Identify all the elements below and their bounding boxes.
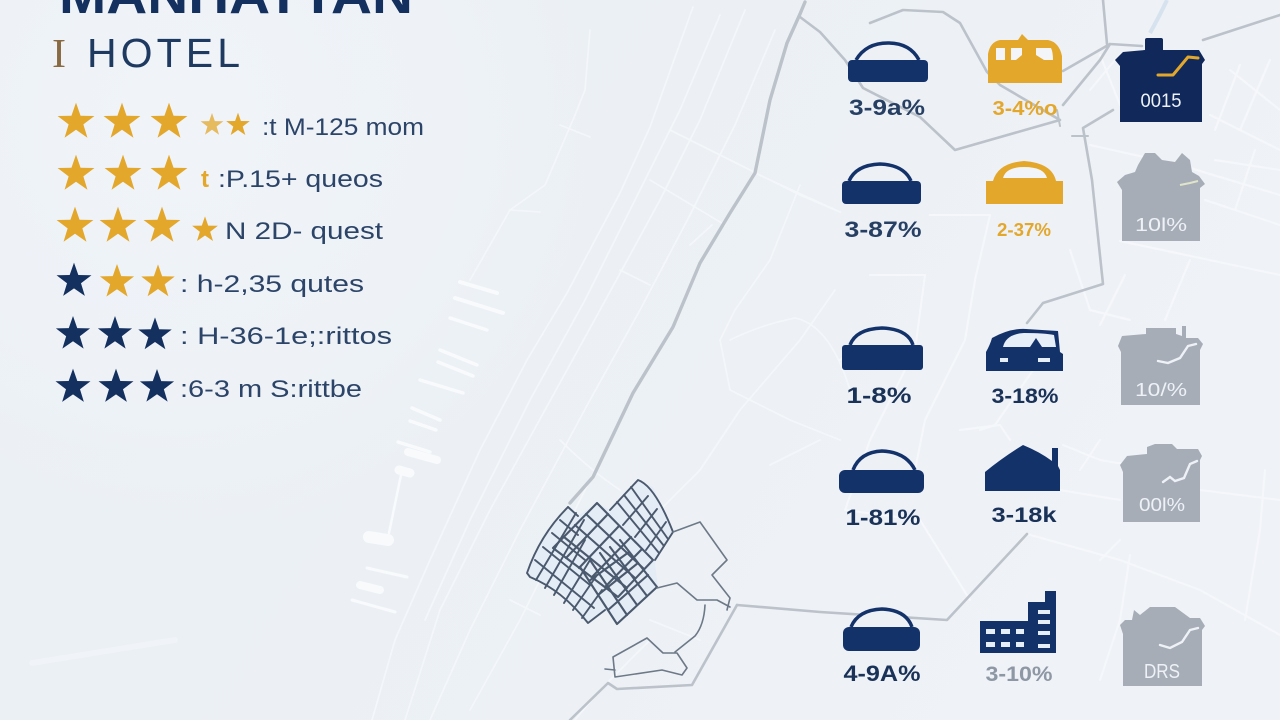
rating row 1: :t M-125 mom (262, 114, 424, 141)
grid block D (580, 540, 657, 624)
column 1 row 3: navy bag with label: 1-8% (846, 383, 912, 408)
column 2 row 3: navy car-shaped hotel icon with label: 3-18% (992, 385, 1059, 408)
map: grey main roads (570, 0, 1280, 720)
rating row 4: : h-2,35 qutes (180, 271, 364, 298)
map: highlighted street grid (527, 480, 673, 624)
column 1 row 4: navy bag with label: 1-81% (846, 505, 920, 530)
rating row 5: : H-36-1e;:rittos (180, 323, 392, 350)
rating row 4 (57, 263, 364, 298)
column 2 row 1: gold hotel icon with label (988, 34, 1062, 120)
column 1 row 5: navy bag with label: 4-9A% (844, 661, 920, 686)
column 2 row 1: gold hotel icon with label: 3-4%o (992, 98, 1058, 120)
rating row 1 (58, 103, 424, 141)
column 3 row 2: grey growth tile: 10l% (1135, 215, 1187, 235)
column 3 row 4: grey growth tile: 00l% (1139, 495, 1185, 515)
road: east connector (1027, 110, 1113, 323)
rating row 6 (56, 369, 362, 403)
column 1 row 1: navy bag with label (848, 43, 928, 120)
map: river (1150, 0, 1167, 33)
grid block B (553, 503, 653, 597)
road: stub (1057, 110, 1088, 136)
column 1 row 2: navy bag with label (842, 164, 922, 242)
column 2 row 2: gold hotel icon with label (986, 161, 1063, 240)
column 1 row 2: navy bag with label: 3-87% (844, 217, 922, 242)
column 3 row 5: grey growth tile (1120, 607, 1205, 686)
column 1 row 4: navy bag with label (839, 451, 924, 530)
rating row 6: :6-3 m S:rittbe (180, 376, 362, 403)
grid block A (527, 507, 605, 623)
road: lower waterfront (570, 605, 737, 720)
road: south connector (737, 534, 1027, 620)
rating row 5 (56, 316, 392, 350)
subtitle: hotel: HOTEL (87, 30, 240, 76)
column 2 row 4: navy dome icon with label (985, 445, 1060, 527)
column 1 row 1: navy bag with label: 3-9a% (849, 95, 925, 120)
column 2 row 4: navy dome icon with label: 3-18k (992, 504, 1057, 527)
map: waterfront piers (32, 282, 503, 663)
rating row 3: N 2D- quest (225, 218, 383, 245)
rating row 3 (57, 207, 383, 245)
map: thin coastline outlines (605, 522, 730, 677)
rating row 2: t (201, 166, 209, 193)
column 1 row 5: navy bag with label (843, 609, 920, 686)
column 3 row 3: grey growth tile: 10/% (1135, 380, 1187, 400)
road: west avenue (570, 2, 805, 503)
column 3 row 2: grey growth tile (1117, 153, 1205, 241)
column 3 row 3: grey growth tile (1118, 326, 1203, 405)
road: upper loop (800, 10, 1060, 150)
subtitle: hotel: I (52, 30, 66, 76)
column 3 row 1: navy growth tile: 0015 (1140, 91, 1182, 112)
column 2 row 5: navy building icon with label (980, 591, 1056, 686)
grid block C (610, 480, 673, 560)
column 2 row 5: navy building icon with label: 3-10% (986, 663, 1053, 686)
column 3 row 4: grey growth tile (1120, 444, 1202, 522)
road: north-east connector (1063, 0, 1280, 105)
column 1 row 3: navy bag with label (842, 328, 923, 408)
rating row 2: :P.15+ queos (218, 166, 383, 193)
rating row 2 (58, 155, 383, 193)
map: white street network (372, 7, 1280, 720)
column 2 row 3: navy car-shaped hotel icon with label (986, 329, 1063, 408)
column 2 row 2: gold hotel icon with label: 2-37% (997, 220, 1051, 240)
column 3 row 5: grey growth tile: DRS (1144, 661, 1180, 683)
column 3 row 1: navy growth tile (1115, 38, 1205, 122)
